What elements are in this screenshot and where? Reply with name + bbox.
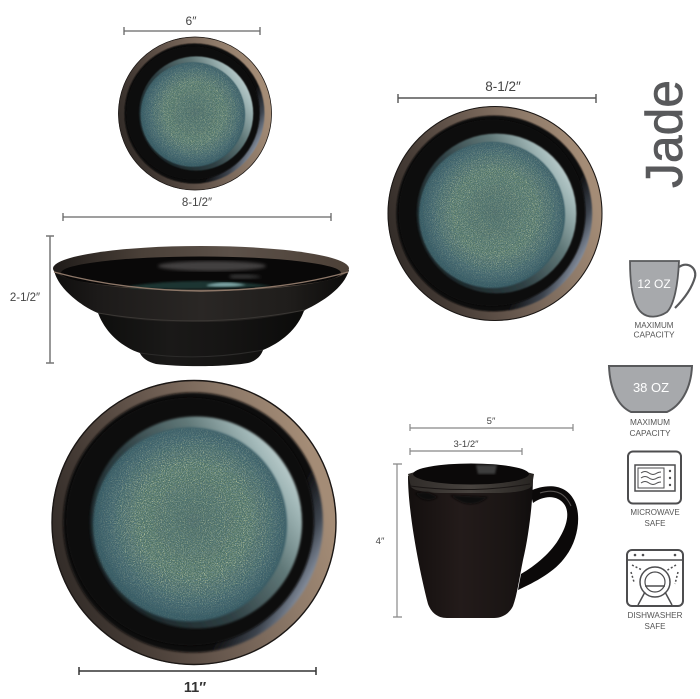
bowl — [53, 246, 349, 366]
medium plate — [388, 106, 602, 321]
dimension: mug 4 in: 4″ — [376, 536, 385, 547]
icon: microwave safe: MICROWAVE — [630, 508, 680, 517]
icon: mug capacity 12 oz: CAPACITY — [634, 330, 675, 340]
dimension: large plate 11 in: 11″ — [184, 680, 206, 696]
dimension: small plate 6 in: 6″ — [186, 14, 197, 28]
icon: bowl capacity 38 oz: CAPACITY — [630, 429, 671, 438]
title: Jade: Jade — [636, 80, 694, 188]
icon: dishwasher safe — [627, 550, 683, 631]
icon: mug capacity 12 oz — [630, 261, 695, 340]
icon: dishwasher safe: SAFE — [645, 622, 665, 631]
icon: mug capacity 12 oz: 12 OZ — [637, 277, 671, 291]
mug — [408, 464, 578, 618]
small plate — [118, 37, 272, 190]
dimension: small plate 6 in — [124, 14, 260, 35]
dimension: medium plate 8-1/2 in — [398, 79, 596, 103]
dimension: mug 5 in — [410, 416, 573, 431]
icon: bowl capacity 38 oz: MAXIMUM — [630, 418, 670, 427]
dimension: mug 4 in — [376, 464, 402, 617]
dimension: bowl height 2-1/2 in: 2-1/2″ — [10, 292, 40, 304]
icon: microwave safe: SAFE — [645, 519, 665, 528]
dimension: mug 3-1/2 in: 3-1/2″ — [453, 439, 479, 450]
dimension: bowl width 8-1/2 in — [63, 197, 331, 221]
icon: mug capacity 12 oz: MAXIMUM — [634, 321, 674, 330]
icon: bowl capacity 38 oz — [609, 366, 692, 438]
dimension: medium plate 8-1/2 in: 8-1/2″ — [485, 79, 521, 94]
dimension: large plate 11 in — [79, 667, 316, 696]
dimension: bowl width 8-1/2 in: 8-1/2″ — [182, 197, 212, 209]
icon: dishwasher safe: DISHWASHER — [628, 611, 683, 620]
dimension: bowl height 2-1/2 in — [10, 236, 54, 363]
dimension: mug 3-1/2 in — [410, 439, 522, 455]
icon: bowl capacity 38 oz: 38 OZ — [633, 380, 669, 395]
dimension: mug 5 in: 5″ — [487, 416, 496, 427]
icon: microwave safe — [628, 452, 681, 528]
large plate — [52, 380, 336, 665]
